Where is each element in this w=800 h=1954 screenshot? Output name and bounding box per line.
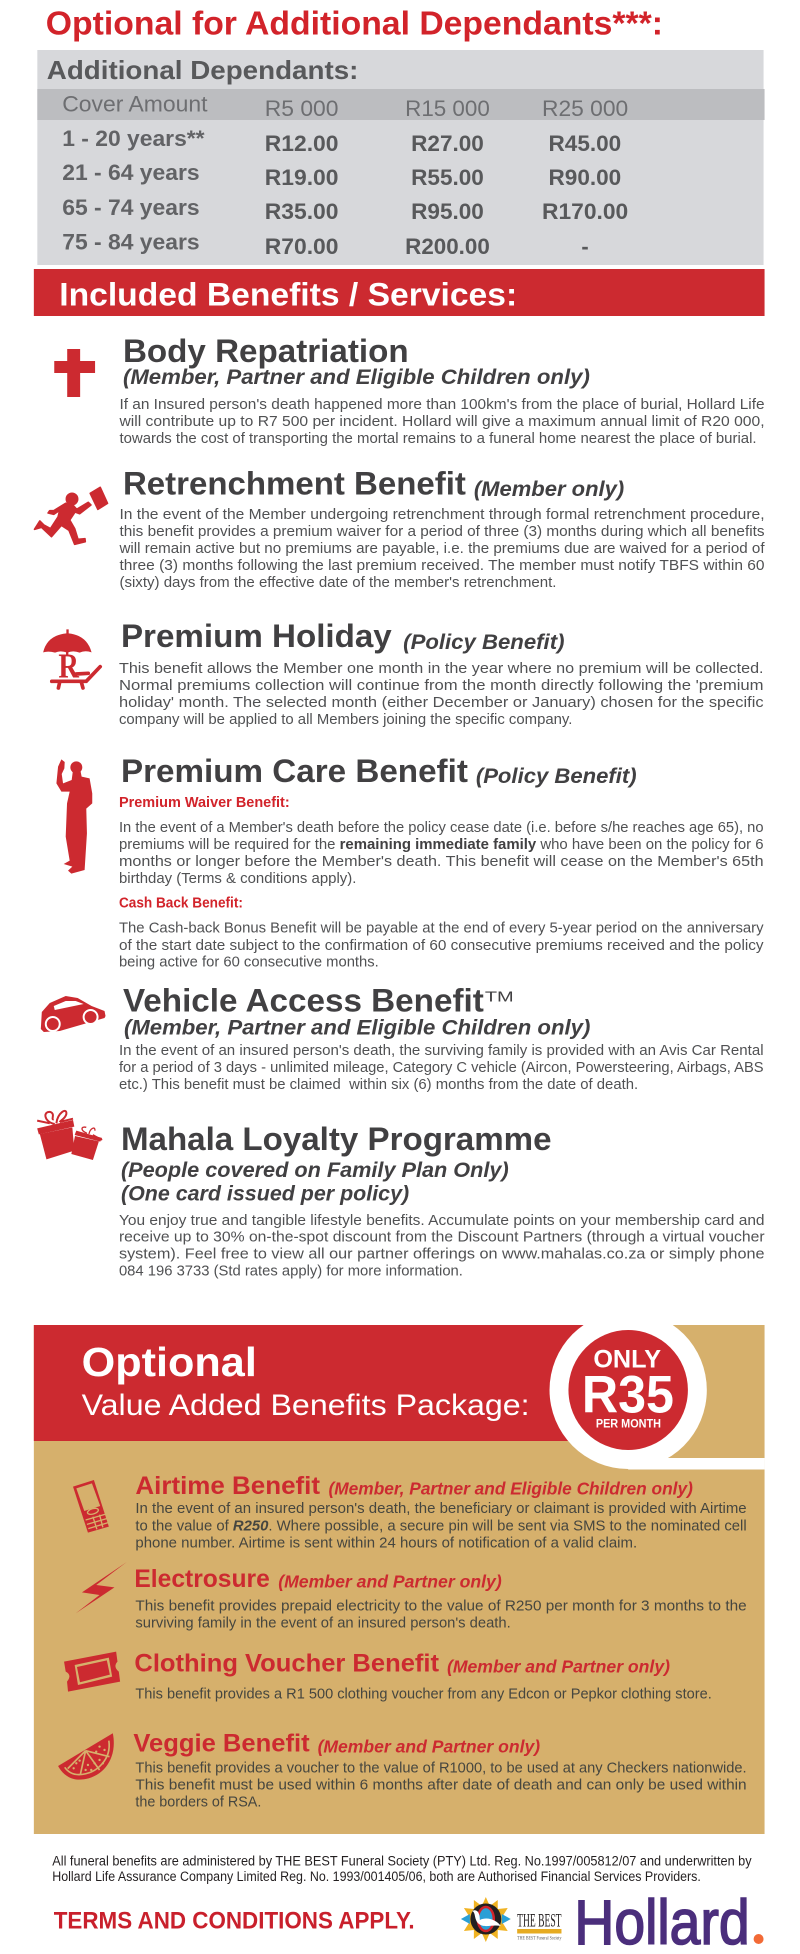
- section: body repatriation: will contribute up to R7 500 per incident. Hollard will give a maximum annual limit of R20 000,: [118, 413, 765, 430]
- panel: optional value added benefits: [34, 1311, 765, 1834]
- banner: included benefits: Included Benefits / Services:: [59, 276, 517, 313]
- icon: umbrella and deck chair: [43, 629, 100, 688]
- table age labels: 1 - 20 years**: [62, 126, 205, 151]
- section: premium care benefit: birthday (Terms & conditions apply).: [119, 870, 356, 887]
- section: airtime benefit: phone number. Airtime is sent within 24 hours of notification of a valid claim.: [135, 1534, 637, 1552]
- icon: standing man waving: [56, 759, 92, 874]
- section: mahala loyalty programme: You enjoy true and tangible lifestyle benefits. Accumulate points on your membership card and: [119, 1212, 765, 1229]
- section: retrenchment benefit: this benefit provides a premium waiver for a period of three (3) months during which all benefits: [119, 523, 765, 540]
- section: veggie benefit: the borders of RSA.: [135, 1793, 261, 1811]
- table header row: R15 000: [405, 96, 490, 121]
- table premium values: R55.00: [411, 165, 484, 190]
- table heading: Additional Dependants:: [47, 57, 358, 85]
- section: body repatriation: towards the cost of transporting the mortal remains to a funeral home nearest the place of burial.: [119, 430, 757, 447]
- section: premium care benefit: The Cash-back Bonus Benefit will be payable at the end of every 5-year period on the anniversary: [119, 919, 764, 937]
- section: body repatriation: Body Repatriation: [123, 333, 409, 369]
- table age labels: [62, 126, 205, 255]
- header band: [34, 1311, 765, 1470]
- table premium values: R170.00: [542, 199, 628, 224]
- section: premium care benefit: In the event of a Member's death before the policy cease date (i.e. before s/he reaches age 65), no: [119, 819, 764, 836]
- section: mahala loyalty programme: (One card issued per policy): [121, 1182, 409, 1206]
- section: premium holiday: Normal premiums collection will continue from the month directly following the 'premium: [119, 677, 764, 694]
- table premium values: R19.00: [265, 165, 338, 190]
- section: mahala loyalty programme: system). Feel free to view all our partner offerings on www.mahalas.co.za or simply phone: [119, 1245, 765, 1263]
- footer disclaimer: All funeral benefits are administered by THE BEST Funeral Society (PTY) Ltd. Reg. No.1997/005812/07 and underwritten by: [52, 1852, 752, 1869]
- icon: cross: [54, 349, 95, 397]
- icon: gift boxes: [37, 1111, 102, 1160]
- section: premium holiday: Premium Holiday: [121, 618, 392, 654]
- table premium values: R90.00: [549, 165, 621, 190]
- section: veggie benefit: This benefit provides a voucher to the value of R1000, to be used at any Checkers nationwide.: [135, 1759, 747, 1777]
- section: electrosure: surviving family in the event of an insured person's death.: [135, 1614, 511, 1632]
- table premium values: R35.00: [265, 199, 338, 224]
- section: veggie benefit: Veggie Benefit: [133, 1729, 310, 1758]
- section: retrenchment benefit: [118, 465, 765, 591]
- section: veggie benefit: This benefit must be used within 6 months after date of death and can only be used within: [135, 1776, 747, 1794]
- footer disclaimer: [52, 1852, 752, 1884]
- section: airtime benefit: to the value of R250. Where possible, a secure pin will be sent via SMS to the nominated cell: [135, 1517, 747, 1535]
- section: airtime benefit: [135, 1472, 747, 1552]
- table premium values: R70.00: [265, 234, 338, 259]
- section: clothing voucher benefit: Clothing Voucher Benefit: [134, 1649, 439, 1678]
- section: body repatriation: [118, 333, 765, 447]
- header band: Value Added Benefits Package:: [82, 1389, 530, 1422]
- section: airtime benefit: Airtime Benefit: [135, 1472, 320, 1500]
- section: premium care benefit: Premium Care Benefit: [121, 753, 468, 789]
- terms notice: TERMS AND CONDITIONS APPLY.: [54, 1907, 415, 1935]
- cash back subheading: Cash Back Benefit:: [119, 894, 243, 912]
- section: premium holiday: holiday' month. The selected month (either December or January) chosen for the specific: [119, 694, 764, 711]
- table header row: R25 000: [542, 96, 628, 121]
- section: airtime benefit: (Member, Partner and Eligible Children only): [329, 1478, 693, 1499]
- table age labels: 21 - 64 years: [62, 160, 200, 185]
- price badge: [568, 1330, 688, 1450]
- table premium values: R200.00: [405, 234, 490, 259]
- section: mahala loyalty programme: (People covered on Family Plan Only): [121, 1159, 509, 1182]
- section: retrenchment benefit: (Member only): [474, 478, 624, 501]
- section: mahala loyalty programme: [119, 1121, 765, 1280]
- section: vehicle access benefit: TM: [485, 988, 514, 1006]
- logo: the best funeral society: THE BEST Funeral Society: [517, 1935, 562, 1942]
- section: premium holiday: [119, 618, 764, 728]
- icon: umbrella and deck chair: R: [58, 647, 80, 685]
- icon: car: [41, 996, 106, 1032]
- price badge: R35: [582, 1365, 674, 1425]
- price badge: PER MONTH: [596, 1416, 661, 1431]
- table age labels: 75 - 84 years: [62, 229, 200, 255]
- section: vehicle access benefit: (Member, Partner and Eligible Children only): [124, 1016, 590, 1040]
- section: premium care benefit: [119, 753, 764, 971]
- section: mahala loyalty programme: Mahala Loyalty Programme: [121, 1121, 552, 1157]
- logo: the best funeral society: [461, 1897, 562, 1942]
- table premium values: -: [581, 234, 589, 259]
- footer disclaimer: Hollard Life Assurance Company Limited Reg. No. 1993/001405/06, both are Authorised Financial Services Providers.: [52, 1868, 701, 1884]
- table premium values: R27.00: [411, 131, 484, 156]
- section: veggie benefit: [133, 1729, 747, 1811]
- section: premium care benefit: of the start date subject to the confirmation of 60 consecutive premiums received and the policy: [119, 937, 764, 954]
- section: clothing voucher benefit: [134, 1649, 712, 1703]
- table header row: Cover Amount: [62, 91, 208, 117]
- section: vehicle access benefit: etc.) This benefit must be claimed within six (6) months from the date of death.: [119, 1076, 638, 1093]
- section: electrosure: This benefit provides prepaid electricity to the value of R250 per month for 3 months to the: [135, 1597, 747, 1615]
- title: Optional for Additional Dependants***:: [46, 4, 663, 42]
- section: body repatriation: If an Insured person's death happened more than 100km's from the place of burial, Hollard Life: [119, 396, 765, 413]
- section: retrenchment benefit: In the event of the Member undergoing retrenchment through formal retrenchment procedure,: [119, 506, 765, 523]
- icon: running man with briefcase: [35, 487, 108, 544]
- section: premium care benefit: (Policy Benefit): [476, 765, 637, 788]
- section: retrenchment benefit: will remain active but no premiums are payable, i.e. the premiums due are waived for a period of: [118, 540, 765, 557]
- section: premium care benefit: premiums will be required for the remaining immediate family who have been on the policy for 6: [119, 836, 764, 853]
- table age labels: 65 - 74 years: [62, 195, 200, 220]
- section: premium holiday: (Policy Benefit): [403, 631, 564, 654]
- icon: voucher ticket: [64, 1652, 120, 1692]
- icon: cell phone: [73, 1480, 109, 1533]
- section: electrosure: (Member and Partner only): [278, 1571, 502, 1592]
- section: premium holiday: company will be applied to all Members joining the specific company.: [119, 711, 572, 728]
- section: retrenchment benefit: (sixty) days from the effective date of the member's retrenchment.: [119, 574, 556, 591]
- section: vehicle access benefit: for a period of 3 days - unlimited mileage, Category C vehicle (Aircon, Powersteering, Airbags, ABS: [119, 1059, 764, 1076]
- section: premium care benefit: being active for 60 consecutive months.: [119, 953, 379, 971]
- panel: additional dependants table: [37, 50, 765, 265]
- heading: optional: Optional: [82, 1339, 257, 1385]
- table premium values: R45.00: [549, 131, 621, 156]
- icon: orange slice: [58, 1733, 114, 1780]
- icon: lightning bolt: [76, 1562, 127, 1613]
- section: vehicle access benefit: In the event of an insured person's death, the surviving family is provided with an Avis Car Rental: [119, 1042, 764, 1059]
- section: electrosure: Electrosure: [134, 1565, 270, 1593]
- premium waiver subheading: Premium Waiver Benefit:: [119, 794, 290, 811]
- section: mahala loyalty programme: receive up to 30% on-the-spot discount from the Discount Partners (through a virtual voucher: [119, 1228, 765, 1246]
- section: airtime benefit: In the event of an insured person's death, the beneficiary or claimant is provided with Airtime: [135, 1500, 747, 1517]
- section: veggie benefit: (Member and Partner only): [318, 1736, 540, 1757]
- section: vehicle access benefit: Vehicle Access Benefit: [123, 982, 484, 1019]
- section: mahala loyalty programme: 084 196 3733 (Std rates apply) for more information.: [119, 1262, 463, 1280]
- section: electrosure: [134, 1565, 747, 1632]
- section: body repatriation: (Member, Partner and Eligible Children only): [123, 366, 590, 389]
- section: premium care benefit: months or longer before the Member's death. This benefit will cease on the Member's 65th: [119, 853, 764, 870]
- banner: included benefits: [34, 269, 765, 316]
- section: clothing voucher benefit: (Member and Partner only): [447, 1656, 670, 1677]
- section: clothing voucher benefit: This benefit provides a R1 500 clothing voucher from any Edcon or Pepkor clothing store.: [135, 1685, 712, 1703]
- table header row: R5 000: [265, 96, 338, 121]
- logo: the best funeral society: THE BEST: [517, 1910, 562, 1932]
- section: retrenchment benefit: three (3) months following the last premium received. The member must notify TBFS within 60: [119, 557, 765, 574]
- table header row: [62, 91, 628, 121]
- section: vehicle access benefit: [119, 982, 764, 1093]
- table premium values: R95.00: [411, 199, 484, 224]
- price badge: ONLY: [593, 1345, 661, 1374]
- table premium values: R12.00: [265, 131, 338, 156]
- table premium values: [265, 131, 628, 259]
- section: retrenchment benefit: Retrenchment Benefit: [123, 465, 466, 502]
- section: premium holiday: This benefit allows the Member one month in the year where no premium will be collected.: [119, 660, 764, 677]
